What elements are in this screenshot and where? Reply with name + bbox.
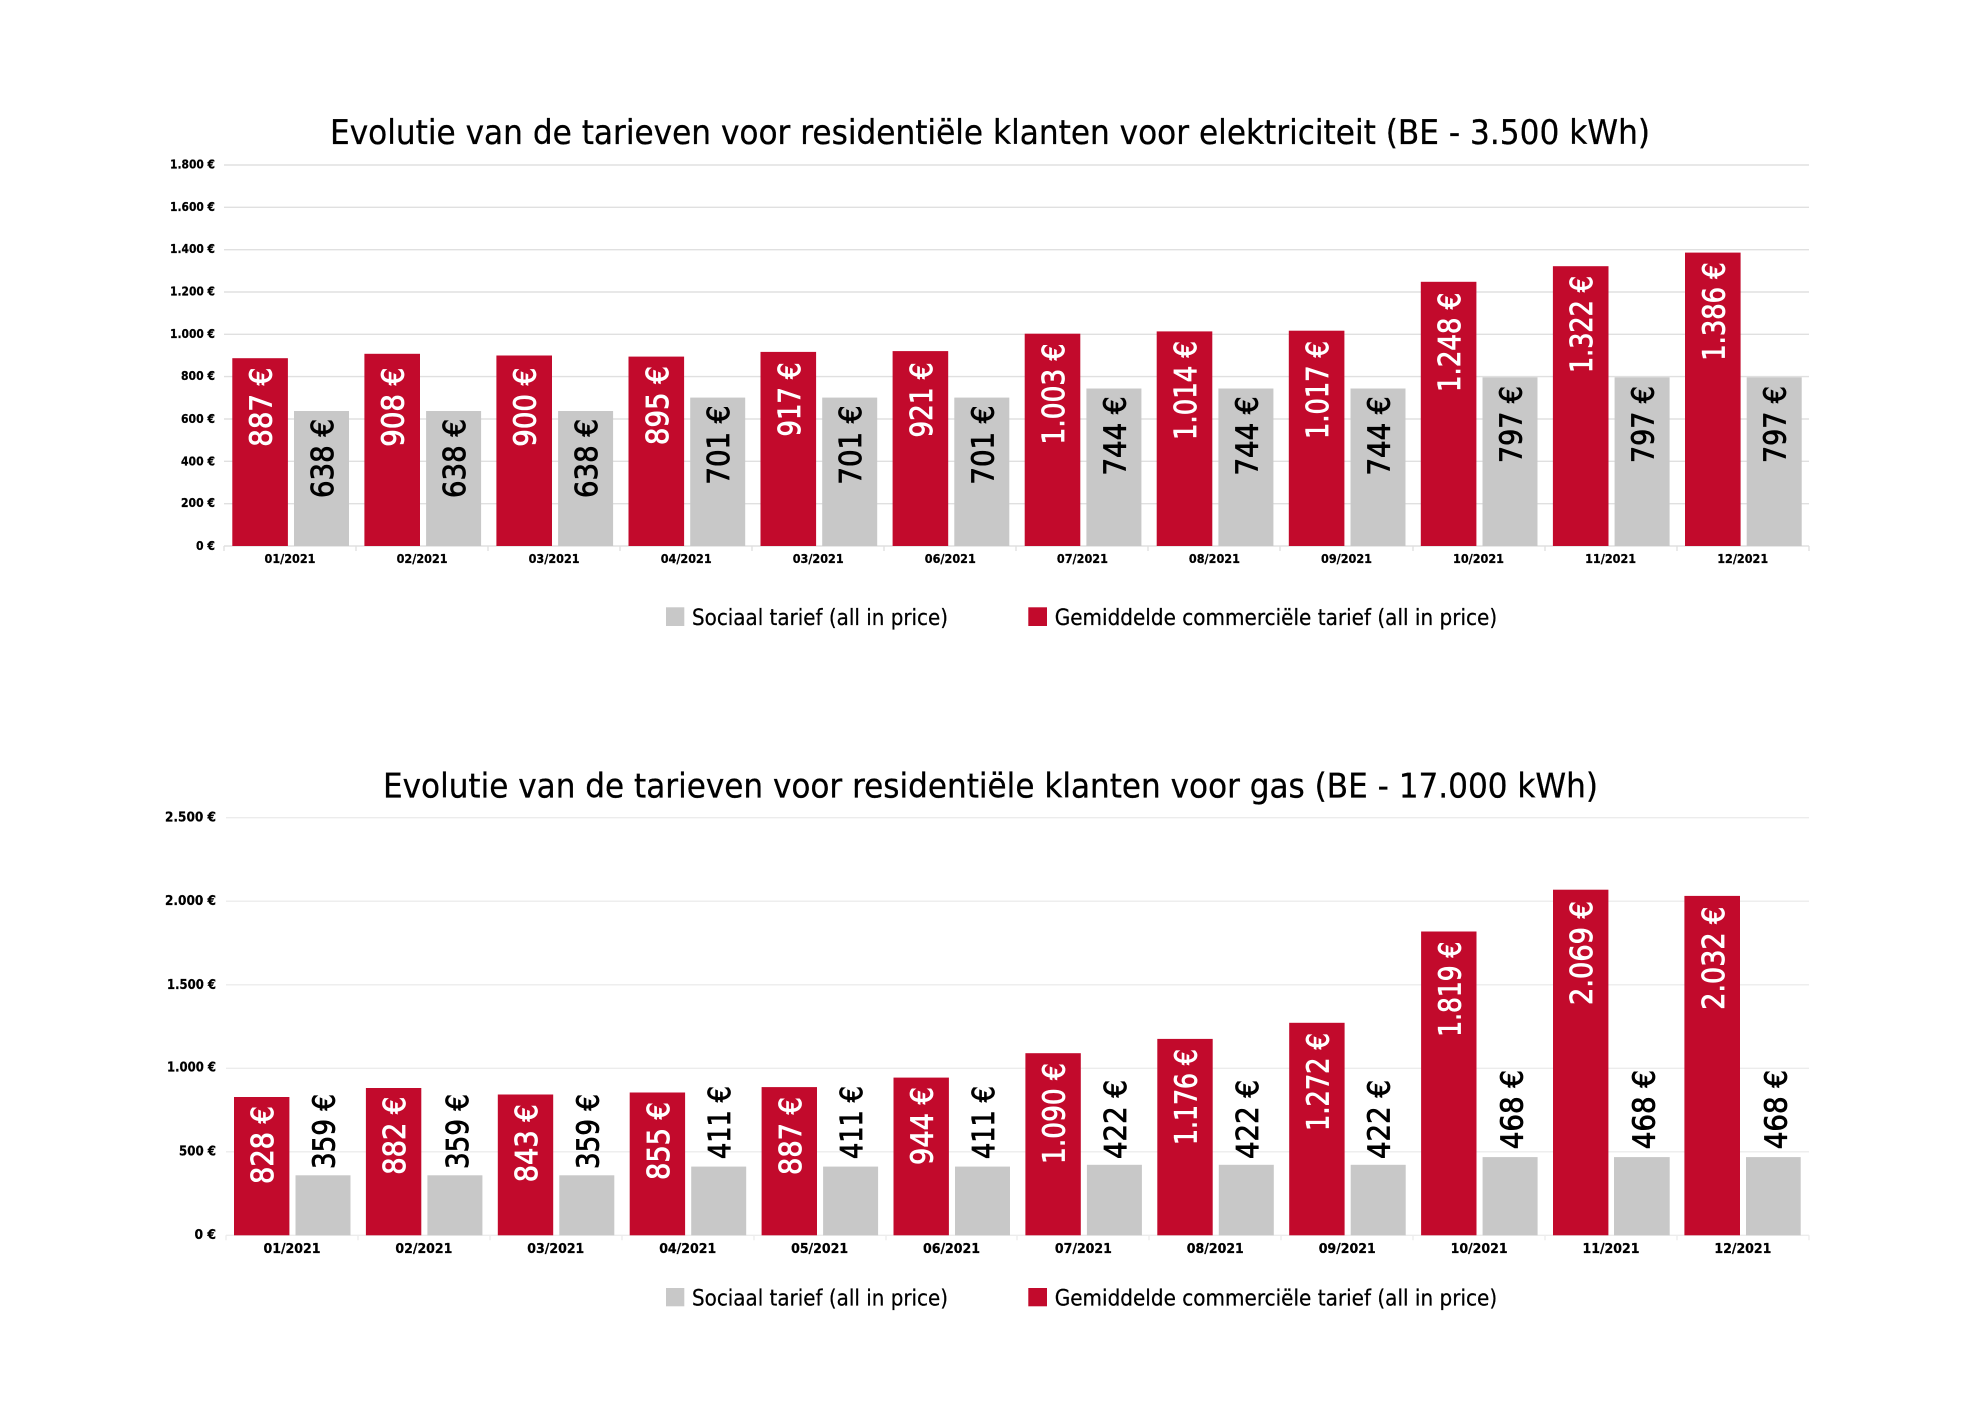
social bar 468 €: 468 € bbox=[1760, 1070, 1794, 1149]
commercial bar 1.017 €: 1.017 € bbox=[1301, 341, 1336, 439]
title: gas: Evolutie van de tarieven voor residentiële klanten voor gas (BE - 17.000 kWh) bbox=[383, 767, 1598, 807]
commercial bar 828 €: 828 € bbox=[246, 1106, 281, 1184]
bar chart: electricity bars bbox=[232, 253, 1802, 546]
x axis labels: 09/2021 bbox=[1321, 552, 1372, 566]
social bar 359 €: 359 € bbox=[308, 1094, 342, 1169]
social bar 411 € bbox=[823, 1086, 878, 1235]
commercial bar 917 € bbox=[760, 352, 816, 546]
month 09/2021 bbox=[1289, 1023, 1406, 1235]
commercial bar 900 €: 900 € bbox=[509, 368, 544, 447]
x axis labels: 04/2021 bbox=[659, 1242, 716, 1257]
y axis labels: 200 € bbox=[181, 496, 215, 510]
social bar 411 €: 411 € bbox=[835, 1086, 870, 1159]
x axis labels: 02/2021 bbox=[397, 552, 448, 566]
social bar 638 €: 638 € bbox=[438, 419, 473, 498]
social bar 797 € bbox=[1482, 377, 1538, 546]
commercial bar 882 € bbox=[366, 1088, 421, 1235]
social bar 468 €: 468 € bbox=[1627, 1070, 1662, 1149]
social bar 411 €: 411 € bbox=[703, 1086, 738, 1159]
month 12/2021 bbox=[1684, 896, 1801, 1235]
social bar 797 €: 797 € bbox=[1759, 386, 1794, 463]
x axis labels: 01/2021 bbox=[264, 552, 316, 566]
x axis labels: 11/2021 bbox=[1585, 552, 1636, 566]
commercial bar 1.014 €: 1.014 € bbox=[1169, 341, 1204, 440]
social bar 744 € bbox=[1218, 388, 1273, 546]
social bar 359 €: 359 € bbox=[572, 1094, 606, 1169]
y axis labels: 1.000 € bbox=[170, 327, 215, 341]
social bar 701 €: 701 € bbox=[966, 406, 1001, 485]
x axis labels bbox=[264, 1242, 1771, 1257]
x axis labels: 03/2021 bbox=[527, 1242, 584, 1257]
y axis labels: 1.500 € bbox=[167, 978, 216, 993]
commercial bar 887 € bbox=[232, 358, 288, 546]
social bar 468 € bbox=[1483, 1070, 1538, 1235]
commercial bar 882 €: 882 € bbox=[378, 1097, 413, 1175]
x axis labels bbox=[264, 552, 1768, 566]
month 05/2021 bbox=[760, 352, 877, 546]
y axis labels: 1.200 € bbox=[170, 284, 215, 298]
commercial bar 908 €: 908 € bbox=[377, 368, 412, 447]
y axis labels: 600 € bbox=[181, 412, 215, 426]
social bar 468 €: 468 € bbox=[1495, 1070, 1530, 1149]
y axis labels: 1.400 € bbox=[170, 242, 215, 256]
commercial bar 887 €: 887 € bbox=[774, 1097, 809, 1175]
y axis labels bbox=[165, 811, 216, 1243]
legend: gas bbox=[666, 1286, 1497, 1311]
month 01/2021 bbox=[232, 358, 349, 546]
month 10/2021 bbox=[1421, 282, 1538, 546]
commercial bar 1.248 €: 1.248 € bbox=[1433, 293, 1468, 392]
x axis labels: 12/2021 bbox=[1717, 552, 1768, 566]
commercial bar 1.176 €: 1.176 € bbox=[1170, 1049, 1204, 1145]
legend: electricity: Gemiddelde commerciële tarief (all in price) bbox=[1055, 606, 1497, 631]
month 08/2021 bbox=[1157, 331, 1273, 546]
social bar 797 €: 797 € bbox=[1494, 386, 1530, 463]
social bar 422 € bbox=[1087, 1080, 1142, 1235]
social bar 411 €: 411 € bbox=[967, 1086, 1002, 1159]
social bar 744 €: 744 € bbox=[1098, 396, 1133, 476]
legend: electricity: Sociaal tarief (all in price) bbox=[692, 606, 948, 631]
x axis labels: 11/2021 bbox=[1582, 1242, 1640, 1257]
commercial bar 1.017 € bbox=[1289, 331, 1344, 546]
social bar 359 €: 359 € bbox=[441, 1094, 476, 1169]
month 11/2021 bbox=[1553, 890, 1670, 1235]
commercial bar 855 € bbox=[630, 1092, 685, 1235]
social bar 422 €: 422 € bbox=[1099, 1080, 1134, 1159]
social bar 797 € bbox=[1747, 377, 1802, 546]
x axis labels: 10/2021 bbox=[1451, 1242, 1508, 1257]
x axis labels: 09/2021 bbox=[1319, 1242, 1376, 1257]
social bar 411 € bbox=[691, 1086, 746, 1235]
commercial bar 1.322 €: 1.322 € bbox=[1565, 276, 1600, 373]
social bar 638 € bbox=[426, 411, 481, 546]
commercial bar 1.272 € bbox=[1289, 1023, 1345, 1235]
commercial bar 1.090 €: 1.090 € bbox=[1038, 1063, 1073, 1164]
commercial bar 1.272 €: 1.272 € bbox=[1301, 1033, 1336, 1131]
legend: electricity bbox=[666, 606, 1497, 631]
social bar 744 €: 744 € bbox=[1230, 396, 1265, 476]
y axis labels: 2.500 € bbox=[165, 811, 216, 826]
commercial bar 1.322 € bbox=[1553, 266, 1608, 546]
month 06/2021 bbox=[894, 1078, 1010, 1235]
commercial bar 1.386 € bbox=[1685, 253, 1741, 546]
month 04/2021 bbox=[628, 357, 745, 546]
social bar 422 € bbox=[1351, 1080, 1406, 1235]
y axis labels: 1.600 € bbox=[170, 200, 215, 214]
x axis labels: 08/2021 bbox=[1187, 1242, 1244, 1257]
social bar 744 € bbox=[1086, 388, 1141, 546]
x axis labels: 12/2021 bbox=[1714, 1242, 1771, 1257]
social bar 797 € bbox=[1615, 377, 1670, 546]
social bar 359 € bbox=[296, 1094, 350, 1235]
month 05/2021 bbox=[762, 1086, 878, 1235]
social bar 468 € bbox=[1614, 1070, 1670, 1235]
social bar 638 €: 638 € bbox=[570, 419, 605, 498]
commercial bar 843 € bbox=[498, 1094, 553, 1235]
x axis labels: 05/2021 bbox=[791, 1242, 848, 1257]
x axis labels: 06/2021 bbox=[925, 552, 976, 566]
x axis labels: 06/2021 bbox=[923, 1242, 980, 1257]
social bar 411 € bbox=[955, 1086, 1010, 1235]
commercial bar 1.090 € bbox=[1025, 1053, 1081, 1235]
x axis labels: 07/2021 bbox=[1057, 552, 1108, 566]
social bar 359 € bbox=[427, 1094, 482, 1235]
commercial bar 944 €: 944 € bbox=[906, 1087, 941, 1165]
legend: gas: Gemiddelde commerciële tarief (all in price) bbox=[1055, 1286, 1497, 1311]
month 06/2021 bbox=[893, 351, 1009, 546]
social bar 701 € bbox=[690, 398, 745, 546]
month 07/2021 bbox=[1025, 334, 1141, 546]
commercial bar 921 €: 921 € bbox=[905, 362, 940, 438]
commercial bar 1.819 € bbox=[1421, 932, 1476, 1235]
month 03/2021 bbox=[496, 356, 613, 546]
commercial bar 828 € bbox=[234, 1097, 289, 1235]
month 02/2021 bbox=[366, 1088, 482, 1235]
social bar 797 €: 797 € bbox=[1627, 386, 1662, 463]
commercial bar 2.069 €: 2.069 € bbox=[1565, 901, 1600, 1005]
y axis labels bbox=[170, 158, 215, 553]
x axis labels: 04/2021 bbox=[661, 552, 712, 566]
commercial bar 895 €: 895 € bbox=[641, 366, 676, 445]
y axis labels: 1.800 € bbox=[170, 158, 215, 172]
title: electricity: Evolutie van de tarieven voor residentiële klanten voor elektriciteit (BE - 3.500 kWh) bbox=[330, 113, 1650, 153]
social bar 701 € bbox=[954, 398, 1009, 546]
commercial bar 1.003 € bbox=[1025, 334, 1080, 546]
y axis labels: 0 € bbox=[194, 1228, 216, 1243]
y axis labels: 800 € bbox=[181, 369, 215, 383]
commercial bar 1.386 €: 1.386 € bbox=[1697, 262, 1732, 361]
x axis labels: 02/2021 bbox=[395, 1242, 452, 1257]
commercial bar 2.032 €: 2.032 € bbox=[1697, 907, 1732, 1010]
month 09/2021 bbox=[1289, 331, 1406, 546]
commercial bar 895 € bbox=[628, 357, 684, 546]
y axis labels: 400 € bbox=[181, 454, 215, 468]
commercial bar 1.003 €: 1.003 € bbox=[1037, 344, 1072, 444]
x axis labels: 07/2021 bbox=[1055, 1242, 1112, 1257]
month 01/2021 bbox=[234, 1094, 350, 1235]
social bar 744 €: 744 € bbox=[1362, 396, 1398, 476]
legend: gas: Sociaal tarief (all in price) bbox=[692, 1286, 948, 1311]
commercial bar 855 €: 855 € bbox=[642, 1102, 677, 1180]
month 02/2021 bbox=[364, 354, 481, 546]
social bar 638 € bbox=[558, 411, 613, 546]
commercial bar 917 €: 917 € bbox=[773, 362, 808, 436]
commercial bar 944 € bbox=[894, 1078, 949, 1235]
commercial bar 887 € bbox=[762, 1087, 817, 1235]
social bar 638 €: 638 € bbox=[306, 419, 341, 498]
social bar 638 € bbox=[294, 411, 349, 546]
month 04/2021 bbox=[630, 1086, 746, 1235]
social bar 422 €: 422 € bbox=[1363, 1080, 1398, 1159]
panel: gas chart bbox=[165, 767, 1809, 1311]
y axis labels: 2.000 € bbox=[165, 894, 216, 909]
x axis labels: 03/2021 bbox=[529, 552, 580, 566]
month 12/2021 bbox=[1685, 253, 1802, 546]
commercial bar 1.248 € bbox=[1421, 282, 1476, 546]
month 08/2021 bbox=[1157, 1039, 1274, 1235]
social bar 744 € bbox=[1350, 388, 1406, 546]
x axis labels: 08/2021 bbox=[1189, 552, 1240, 566]
y axis labels: 1.000 € bbox=[167, 1060, 216, 1076]
social bar 701 €: 701 € bbox=[702, 406, 737, 485]
social bar 468 € bbox=[1746, 1070, 1801, 1235]
month 11/2021 bbox=[1553, 266, 1670, 546]
social bar 422 €: 422 € bbox=[1231, 1080, 1266, 1159]
bar chart: gas bars bbox=[234, 890, 1801, 1235]
y axis labels: 0 € bbox=[196, 539, 215, 553]
commercial bar 900 € bbox=[496, 356, 552, 546]
month 07/2021 bbox=[1025, 1053, 1142, 1235]
social bar 422 € bbox=[1219, 1080, 1274, 1235]
commercial bar 908 € bbox=[364, 354, 420, 546]
month 03/2021 bbox=[498, 1094, 614, 1235]
commercial bar 887 €: 887 € bbox=[245, 368, 280, 447]
social bar 701 €: 701 € bbox=[834, 406, 869, 485]
commercial bar 1.819 €: 1.819 € bbox=[1433, 942, 1468, 1037]
x axis labels: 01/2021 bbox=[264, 1242, 320, 1257]
x axis labels: 03/2021 bbox=[793, 552, 844, 566]
panel: electricity chart bbox=[170, 113, 1809, 631]
commercial bar 2.069 € bbox=[1553, 890, 1608, 1235]
commercial bar 2.032 € bbox=[1684, 896, 1740, 1235]
month 10/2021 bbox=[1421, 932, 1538, 1235]
commercial bar 1.014 € bbox=[1157, 331, 1212, 546]
commercial bar 921 € bbox=[893, 351, 948, 546]
social bar 701 € bbox=[822, 398, 877, 546]
commercial bar 843 €: 843 € bbox=[510, 1104, 545, 1182]
y axis labels: 500 € bbox=[179, 1144, 216, 1160]
social bar 359 € bbox=[559, 1094, 614, 1235]
commercial bar 1.176 € bbox=[1157, 1039, 1213, 1235]
x axis labels: 10/2021 bbox=[1453, 552, 1504, 566]
